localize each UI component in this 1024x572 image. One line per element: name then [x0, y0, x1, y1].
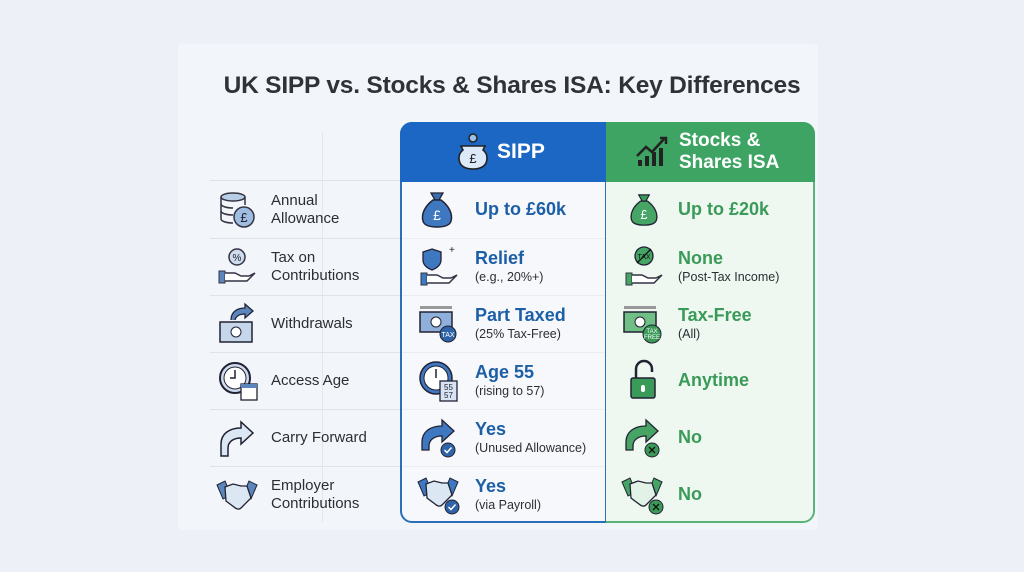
value: No — [678, 427, 702, 447]
icon: arrow check — [421, 418, 456, 458]
icon: handshake cross — [621, 477, 664, 514]
label: Allowance — [271, 210, 339, 227]
icon: arrow cross — [625, 418, 660, 458]
icon: money bag green: £ — [641, 208, 648, 222]
row: Annual Allowance — [220, 192, 769, 228]
icon: hand shield — [420, 245, 458, 286]
icon: pot: £ — [469, 151, 477, 166]
value: (rising to 57) — [475, 384, 544, 398]
value: None — [678, 248, 723, 268]
icon: cash tax: TAX — [441, 332, 455, 339]
value: Age 55 — [475, 362, 534, 382]
value: Up to £60k — [475, 199, 566, 219]
icon: clock 55/57: 57 — [444, 391, 453, 400]
icon: coins: £ — [240, 210, 248, 225]
icon: hand percent — [218, 248, 256, 284]
icon: clock 55/57: 55 — [444, 383, 453, 392]
label: Withdrawals — [271, 315, 353, 332]
value — [475, 419, 586, 455]
row: Withdrawals — [219, 302, 752, 344]
label: Contributions — [271, 495, 359, 512]
value — [475, 476, 541, 512]
icon: hand tax crossed: TAX — [637, 254, 651, 261]
value: Up to £20k — [678, 199, 769, 219]
icon: cash tax free: FREE — [644, 335, 660, 341]
label: Contributions — [271, 267, 359, 284]
panel: ISA column — [606, 122, 815, 523]
value: Relief — [475, 248, 524, 268]
icon: cash with arrow — [219, 302, 254, 343]
row dividers — [210, 180, 814, 181]
value: Part Taxed — [475, 305, 566, 325]
value: (25% Tax-Free) — [475, 327, 561, 341]
row: Carry Forward — [220, 418, 702, 458]
header text: SIPP — [497, 140, 545, 163]
value: (All) — [678, 327, 700, 341]
value — [678, 305, 752, 341]
value — [475, 362, 544, 398]
label: Tax on — [271, 249, 315, 266]
icon: growth chart — [636, 136, 668, 166]
SIPP header — [400, 122, 609, 182]
header text — [679, 130, 779, 173]
label: Access Age — [271, 372, 349, 389]
value: (Post-Tax Income) — [678, 270, 779, 284]
label — [271, 249, 359, 284]
icon: handshake check — [417, 477, 460, 514]
label — [271, 192, 339, 227]
row: Access Age — [219, 360, 749, 402]
icon: hand percent: % — [233, 253, 242, 264]
icon: forward arrow — [220, 420, 254, 457]
icon: cash tax — [419, 306, 456, 342]
value: (e.g., 20%+) — [475, 270, 543, 284]
value: (via Payroll) — [475, 498, 541, 512]
icon: coins — [220, 192, 255, 228]
icon: pot — [458, 133, 488, 170]
header text: Shares ISA — [679, 152, 779, 173]
icon: cash tax free: TAX — [646, 329, 658, 335]
icon: clock 55/57 — [419, 361, 458, 402]
icon: cash tax free — [623, 306, 662, 344]
icon: hand shield: + — [449, 245, 455, 256]
row: Employer Contributions — [216, 476, 702, 514]
row: Tax on Contributions — [218, 245, 779, 286]
value: Yes — [475, 419, 506, 439]
label — [271, 477, 359, 512]
icon: hand tax crossed — [626, 246, 662, 286]
value — [475, 305, 566, 341]
icon: money bag green — [630, 194, 658, 226]
icon: money bag blue: £ — [433, 207, 441, 223]
icon: padlock open — [630, 360, 656, 399]
value: Yes — [475, 476, 506, 496]
value — [678, 248, 779, 284]
value: Anytime — [678, 370, 749, 390]
value — [475, 248, 543, 284]
title: UK SIPP vs. Stocks & Shares ISA: Key Differences — [224, 72, 800, 99]
panel: SIPP column — [400, 122, 607, 523]
ISA header — [606, 122, 815, 182]
icon: clock calendar — [219, 362, 258, 401]
value: (Unused Allowance) — [475, 441, 586, 455]
value: No — [678, 484, 702, 504]
label: Employer — [271, 477, 334, 494]
label: Carry Forward — [271, 429, 367, 446]
background card — [178, 44, 818, 530]
left column vertical divider — [322, 132, 323, 522]
icon: handshake — [216, 480, 258, 510]
header text: Stocks & — [679, 130, 760, 151]
value: Tax-Free — [678, 305, 752, 325]
icon: money bag blue — [422, 192, 452, 228]
label: Annual — [271, 192, 318, 209]
